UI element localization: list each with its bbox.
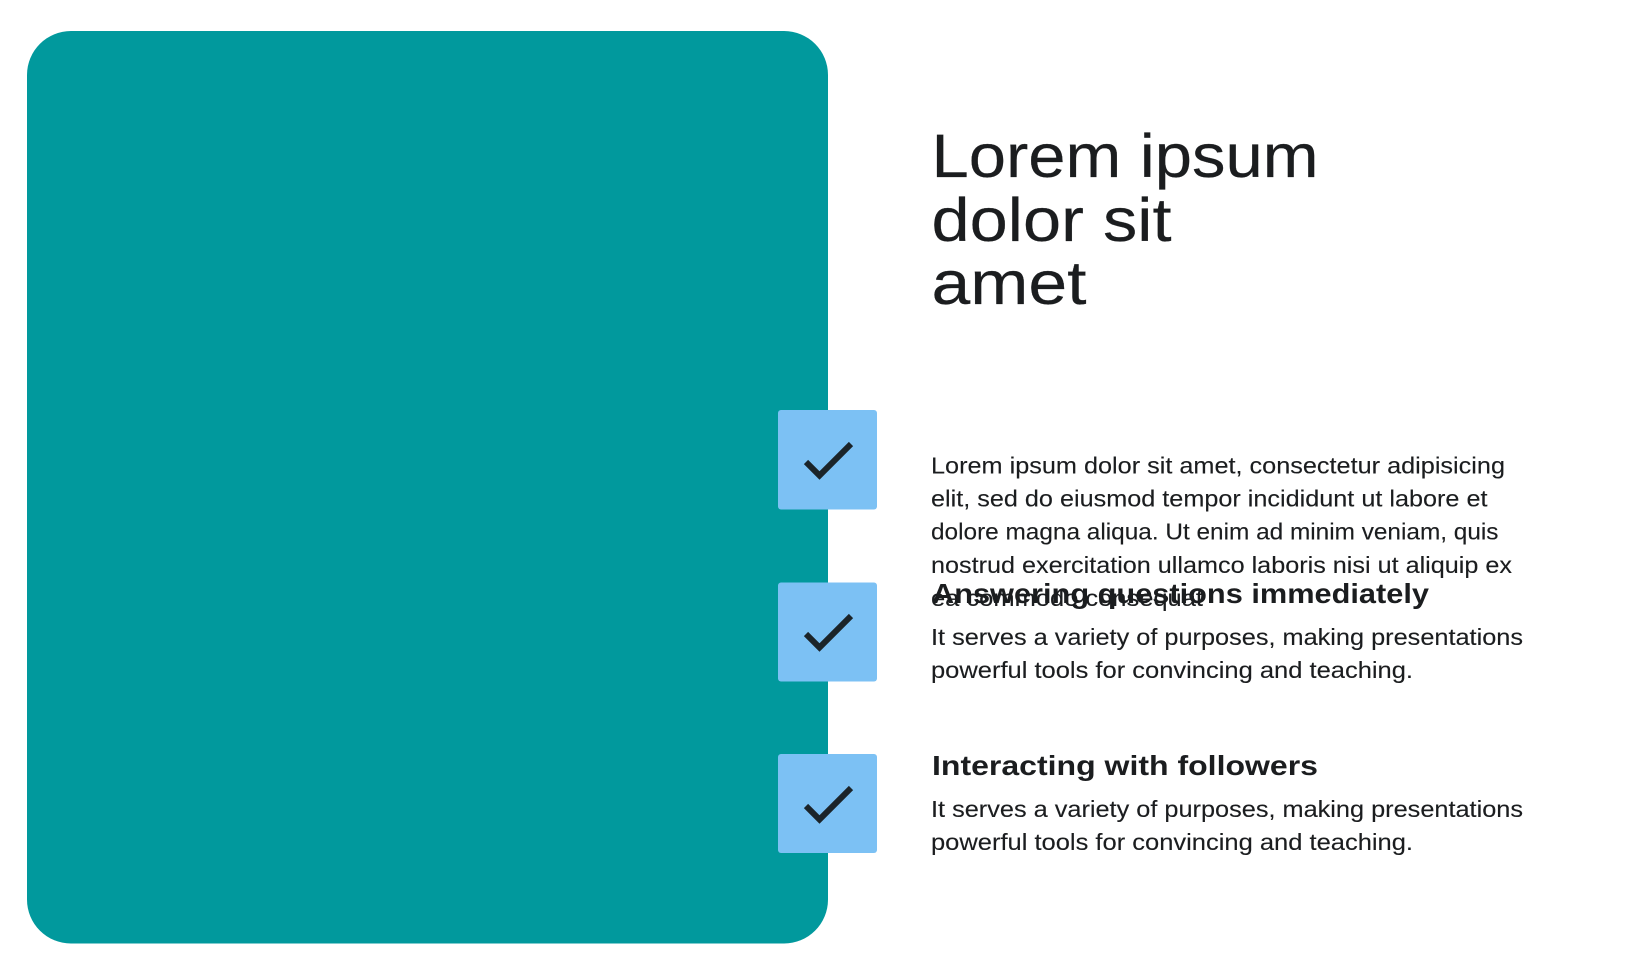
item: answering questions immediately xyxy=(931,578,1523,683)
item: interacting with followers xyxy=(931,750,1523,855)
intro paragraph: Lorem ipsum dolor sit amet, consectetur adipisicing xyxy=(931,452,1505,478)
item: interacting with followers: Interacting with followers xyxy=(932,750,1318,781)
checkbox icon 1 xyxy=(778,410,877,510)
intro paragraph xyxy=(931,452,1513,611)
title xyxy=(932,122,1318,317)
checkbox icon 3 xyxy=(778,754,877,853)
intro paragraph: dolore magna aliqua. Ut enim ad minim veniam, quis xyxy=(931,518,1498,544)
title: Lorem ipsum xyxy=(932,122,1318,190)
panel: teal rounded image placeholder xyxy=(27,31,828,944)
checkbox icon 2 xyxy=(778,582,877,682)
item: interacting with followers: powerful tools for convincing and teaching. xyxy=(931,829,1413,855)
title: dolor sit xyxy=(932,186,1172,254)
intro paragraph: elit, sed do eiusmod tempor incididunt ut labore et xyxy=(931,486,1488,512)
intro paragraph: ea commodo consequat xyxy=(931,585,1204,611)
item: answering questions immediately: It serves a variety of purposes, making presentations xyxy=(931,624,1523,650)
item: interacting with followers: It serves a variety of purposes, making presentations xyxy=(931,796,1523,822)
item: answering questions immediately: powerful tools for convincing and teaching. xyxy=(931,657,1413,683)
item: answering questions immediately: Answering questions immediately xyxy=(932,578,1429,609)
intro paragraph: nostrud exercitation ullamco laboris nisi ut aliquip ex xyxy=(931,552,1513,578)
title: amet xyxy=(932,249,1087,317)
